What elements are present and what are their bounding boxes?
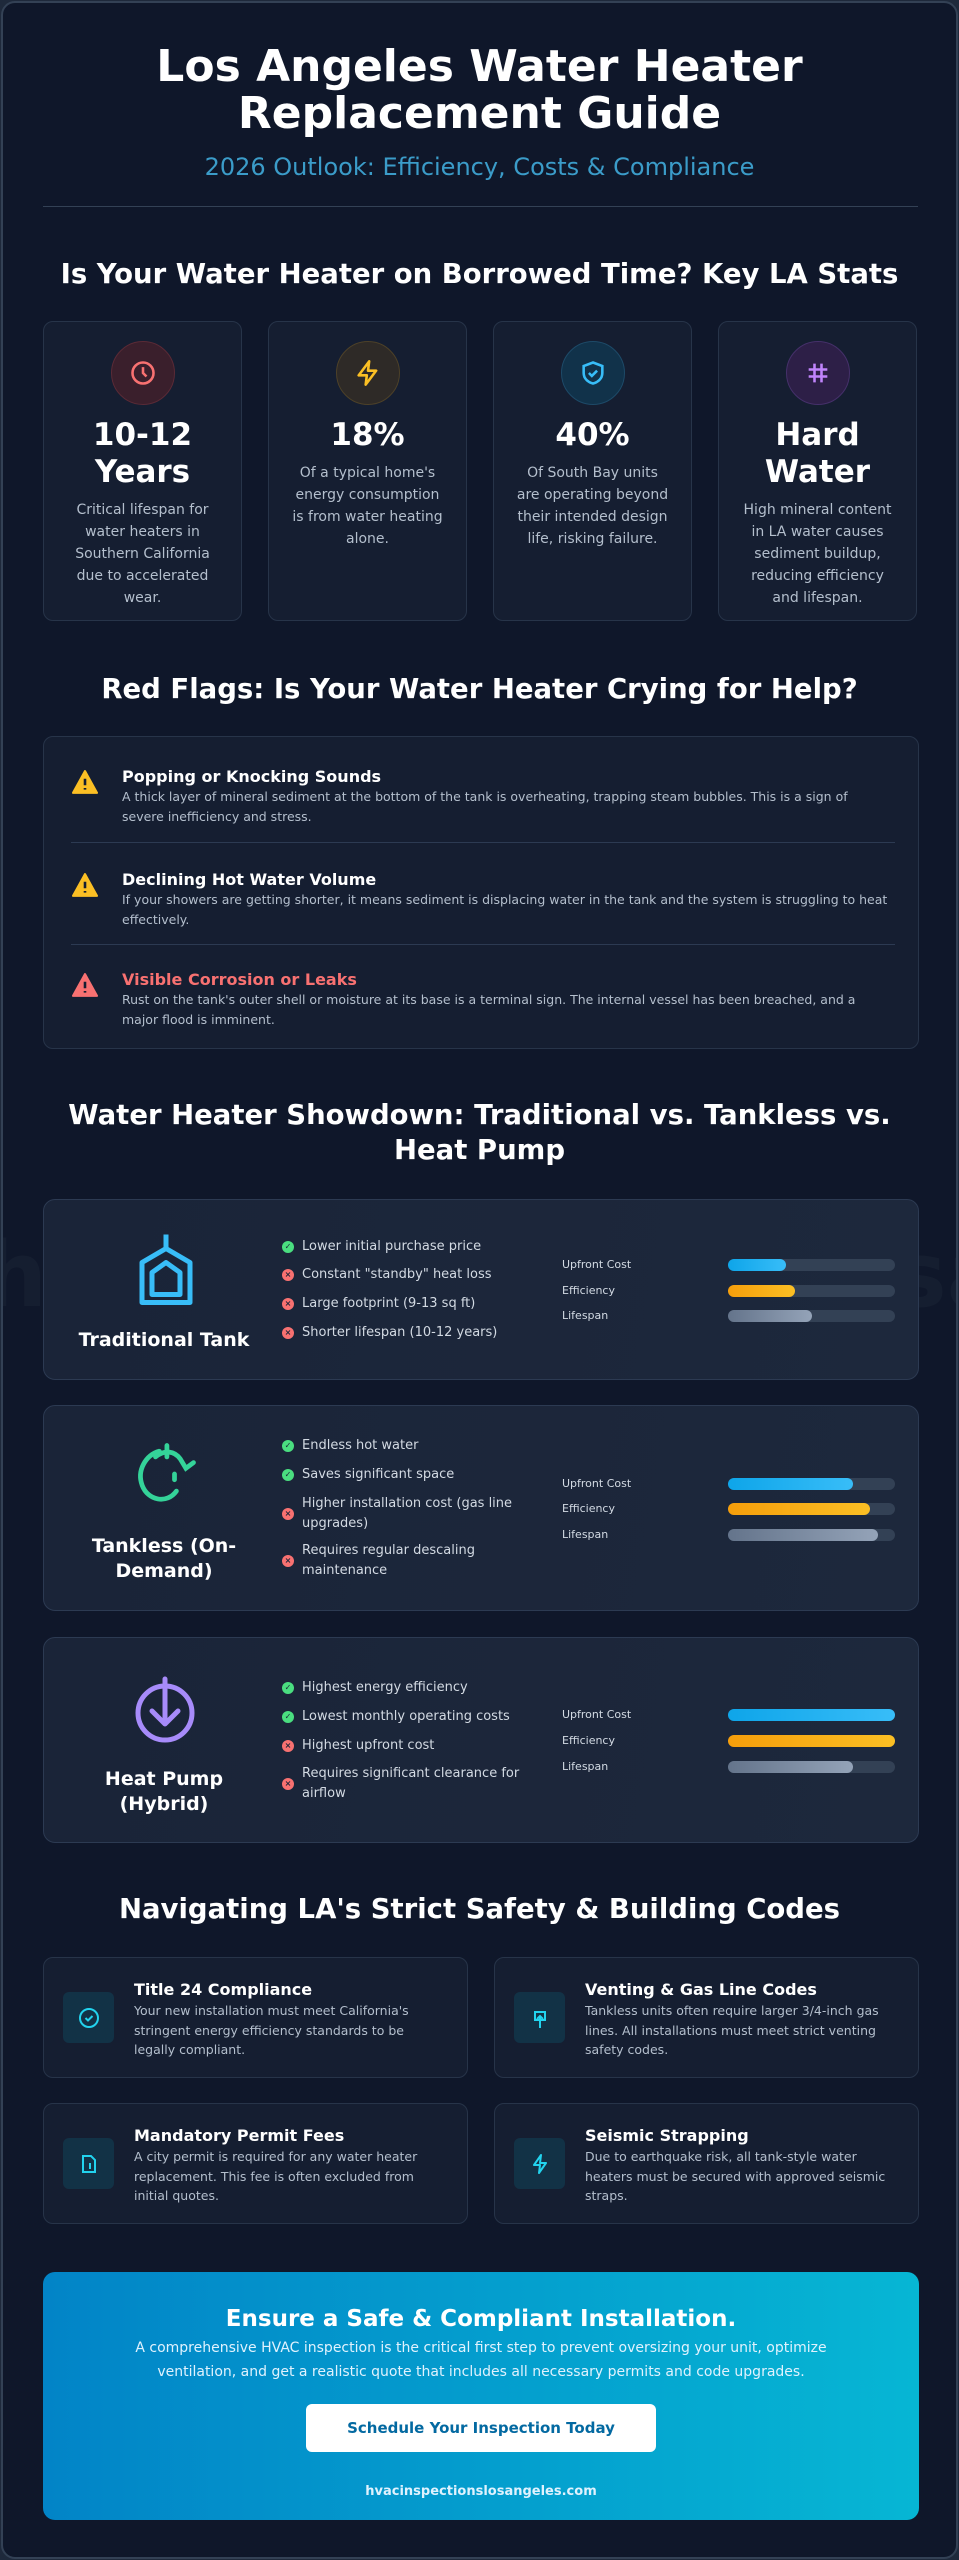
code card: permit [43,2103,468,2224]
icon: shield [560,341,624,405]
comparison card: tankless: × [285,1556,291,1565]
comparison card: tankless: Demand) [115,1560,213,1582]
comparison card: traditional tank: Shorter lifespan (10-12 years) [302,1325,497,1340]
stat card: lifespan [43,321,242,621]
heading: showdown: Water Heater Showdown: Traditional vs. Tankless vs. [68,1099,891,1131]
comparison card: traditional tank: × [285,1328,291,1337]
comparison card: heat pump: Lowest monthly operating costs [302,1709,510,1724]
comparison card: heat pump: Lifespan [562,1760,608,1773]
comparison card: tankless: Efficiency [562,1502,615,1515]
comparison card: tankless: Requires regular descaling maintenance [302,1543,475,1578]
icon: heat pump [136,1676,194,1742]
flag 1: Popping or Knocking Sounds [122,767,381,786]
heading: key stats: Is Your Water Heater on Borrowed Time? Key LA Stats [61,258,898,290]
comparison card: traditional tank: ✓ [285,1242,291,1251]
comparison card: heat pump: Efficiency [562,1734,615,1747]
comparison card: tankless: ✓ [285,1470,291,1479]
CTA panel: A comprehensive HVAC inspection is the critical first step to prevent oversizing your unit, optimize ventilation, and get a realistic quote that includes all necessary permits and code upgrades. [135,2340,827,2380]
CTA panel: Ensure a Safe & Compliant Installation. [226,2306,736,2332]
comparison card: heat pump: Upfront Cost [562,1708,631,1721]
icon: bolt [514,2138,565,2189]
code card: seismic: Seismic Strapping [585,2126,749,2145]
icon: tankless [138,1443,196,1502]
comparison card: heat pump: Highest upfront cost [302,1738,434,1753]
heading: showdown [68,1099,891,1166]
code card: title 24 [43,1957,468,2078]
comparison card: heat pump: × [285,1741,291,1750]
flag 1 [72,767,848,824]
flag 1: A thick layer of mineral sediment at the bottom of the tank is overheating, trapping steam bubbles. This is a sign of severe inefficiency and stress. [122,789,848,824]
comparison card: tankless: Lifespan [562,1528,608,1541]
heading: red flags: Red Flags: Is Your Water Heater Crying for Help? [101,673,858,705]
comparison card: traditional tank: × [285,1299,291,1308]
stat card: energy: Of a typical home's energy consumption is from water heating alone. [292,465,443,547]
stat card: hard water: High mineral content in LA water causes sediment buildup, reducing efficiency and lifespan. [744,502,891,606]
comparison card: tankless: Endless hot water [302,1438,418,1453]
code card: permit: Mandatory Permit Fees [134,2126,344,2145]
comparison card: traditional tank: Efficiency [562,1284,615,1297]
comparison card: tankless: Saves significant space [302,1467,454,1482]
stat card: lifespan: Years [95,454,190,490]
comparison card: traditional tank: × [285,1270,291,1279]
flag 3: Visible Corrosion or Leaks [122,970,357,989]
icon: clock [110,341,174,405]
stat card: hard water: Hard [775,417,860,453]
icon: grid [786,341,850,405]
comparison card: tankless: Tankless (On- [92,1535,236,1557]
code card: permit: A city permit is required for any water heater replacement. This fee is often excluded from initial quotes. [134,2149,417,2203]
title [156,41,803,139]
heading: showdown: Heat Pump [394,1134,565,1166]
comparison card: traditional tank: Large footprint (9-13 sq ft) [302,1296,475,1311]
code card: title 24: Your new installation must meet California's stringent energy efficiency standards to be legally compliant. [134,2003,409,2057]
comparison card: traditional tank: Constant "standby" heat loss [302,1267,491,1282]
flag 3: Rust on the tank's outer shell or moisture at its base is a terminal sign. The internal vessel has been breached, and a major flood is imminent. [122,992,855,1027]
comparison card: traditional tank: Traditional Tank [79,1329,249,1351]
button [306,2404,656,2452]
title: Los Angeles Water Heater [156,41,803,92]
stat card: south bay [493,321,692,621]
flag 3 [72,970,855,1027]
code card: seismic [494,2103,919,2224]
flag 2 [72,870,887,927]
code card: seismic: Due to earthquake risk, all tank-style water heaters must be secured with approved seismic straps. [585,2149,885,2203]
comparison card: heat pump: Requires significant clearance for airflow [302,1766,519,1801]
title: Replacement Guide [238,88,721,139]
code card: venting: Tankless units often require larger 3/4-inch gas lines. All installations must meet strict venting safety codes. [585,2003,879,2057]
subtitle: 2026 Outlook: Efficiency, Costs & Compliance [205,153,754,181]
flag 2: Declining Hot Water Volume [122,870,376,889]
comparison card: heat pump: × [285,1779,291,1788]
stat card: lifespan: Critical lifespan for water heaters in Southern California due to accelerated wear. [75,502,210,606]
code card: venting [494,1957,919,2078]
stat card: lifespan: 10-12 [93,417,192,453]
comparison card: heat pump: (Hybrid) [120,1793,208,1815]
comparison card: tankless: × [285,1509,291,1518]
comparison card: tankless [43,1405,919,1611]
comparison card: heat pump: Heat Pump [105,1768,223,1790]
icon: document [63,2138,114,2189]
CTA panel [43,2272,919,2520]
heading: codes: Navigating LA's Strict Safety & Building Codes [119,1893,840,1925]
comparison card: heat pump: ✓ [285,1712,291,1721]
comparison card: tankless: Higher installation cost (gas line upgrades) [302,1496,512,1531]
comparison card: heat pump: Highest energy efficiency [302,1680,468,1695]
comparison card: traditional tank: Lifespan [562,1309,608,1322]
panel: red flags [43,736,919,1049]
code card: venting: Venting & Gas Line Codes [585,1980,817,1999]
stat card: energy [268,321,467,621]
stat card: south bay: 40% [555,417,630,453]
button: Schedule Your Inspection Today [347,2419,615,2437]
comparison card: tankless: Upfront Cost [562,1477,631,1490]
stat card: south bay: Of South Bay units are operating beyond their intended design life, risking failure. [517,465,668,547]
CTA panel: hvacinspectionslosangeles.com [365,2484,597,2499]
comparison card: heat pump: ✓ [285,1683,291,1692]
icon: vent [514,1992,565,2043]
comparison card: traditional tank: Upfront Cost [562,1258,631,1271]
icon: bolt [336,341,400,405]
stat card: energy: 18% [330,417,405,453]
comparison card: traditional tank: Lower initial purchase price [302,1239,481,1254]
comparison card: heat pump [43,1637,919,1843]
stat card: hard water: Water [765,454,870,490]
icon: tank [140,1234,192,1305]
icon: check circle [63,1992,114,2043]
comparison card: traditional tank [43,1199,919,1380]
flag 2: If your showers are getting shorter, it means sediment is displacing water in the tank and the system is struggling to heat effectively. [122,892,887,927]
stat card: hard water [718,321,917,621]
code card: title 24: Title 24 Compliance [134,1980,312,1999]
comparison card: tankless: ✓ [285,1441,291,1450]
